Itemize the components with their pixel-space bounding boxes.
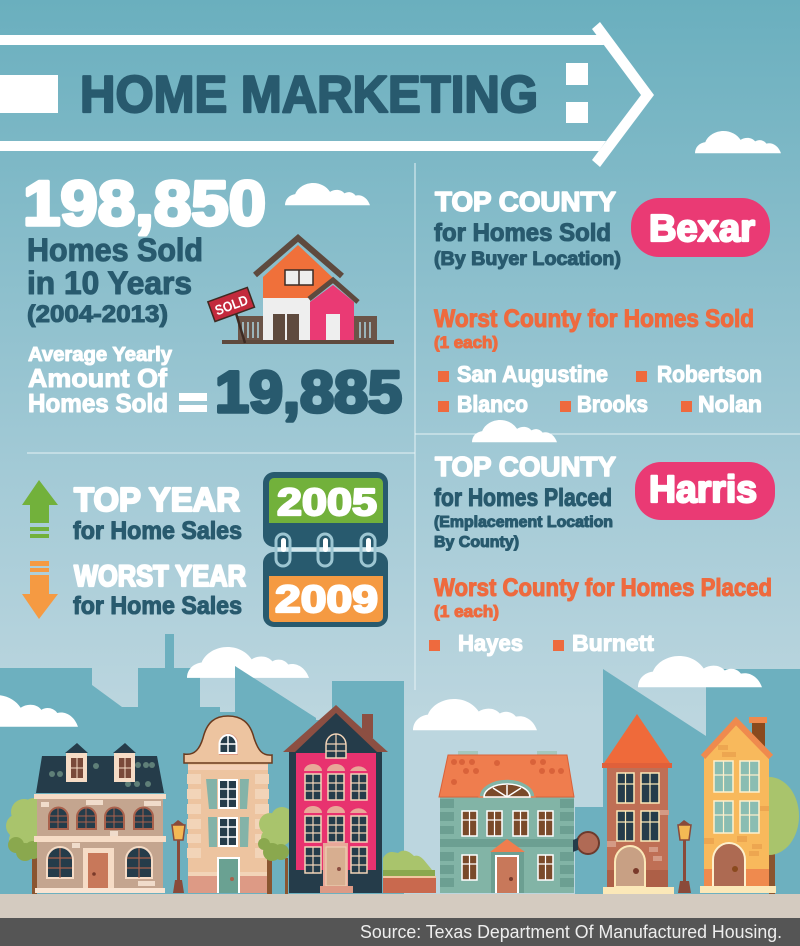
house 4 bbox=[439, 751, 574, 893]
shrub and brick wall bbox=[383, 851, 436, 893]
average yearly block bbox=[28, 344, 402, 425]
hanging shop sign bbox=[573, 832, 599, 854]
panel: top county homes sold: for Homes Sold bbox=[434, 219, 611, 247]
total homes sold block bbox=[23, 169, 266, 328]
skyline bbox=[0, 634, 800, 895]
top year text: for Home Sales bbox=[73, 517, 242, 545]
panel: worst county homes placed: Hayes bbox=[458, 630, 523, 656]
panel: top county homes sold: (By Buyer Location) bbox=[434, 249, 621, 270]
average yearly block: Homes Sold bbox=[28, 388, 168, 418]
panel: top county homes placed: By County) bbox=[434, 534, 519, 551]
panel: worst county homes sold: Brooks bbox=[577, 391, 648, 417]
panel: worst county homes sold: (1 each) bbox=[434, 333, 498, 352]
panel: worst county homes sold: Blanco bbox=[457, 391, 528, 417]
cloud behind skyline bbox=[187, 647, 309, 678]
top year text bbox=[73, 481, 242, 545]
calendar bbox=[263, 472, 388, 627]
house 1 bbox=[34, 743, 166, 893]
big number: 198,850 bbox=[23, 169, 266, 239]
left title block bbox=[0, 75, 58, 113]
average yearly block: Average Yearly bbox=[28, 344, 173, 366]
worst year text: for Home Sales bbox=[73, 592, 242, 620]
street lamp left bbox=[172, 820, 185, 893]
panel: worst county homes placed: (1 each) bbox=[434, 602, 499, 621]
panel: worst county homes sold: Worst County for Homes Sold bbox=[434, 305, 754, 333]
icon: up arrow bbox=[22, 480, 58, 538]
worst year text bbox=[73, 560, 246, 620]
tree left bbox=[6, 798, 46, 894]
pill: Bexar: Bexar bbox=[649, 208, 755, 250]
top year text: TOP YEAR bbox=[74, 481, 240, 518]
average number: 19,885 bbox=[215, 360, 402, 425]
divider lines bbox=[27, 163, 800, 690]
icon: house with sold sign: SOLD bbox=[213, 292, 250, 318]
worst year text: WORST YEAR bbox=[74, 560, 246, 593]
cloud centre skyline bbox=[413, 699, 537, 730]
homes sold text: Homes Sold bbox=[27, 232, 203, 268]
panel: top county homes placed: for Homes Placed bbox=[434, 484, 612, 512]
house 2 bbox=[184, 716, 272, 893]
total homes sold block: (2004-2013) bbox=[27, 301, 168, 328]
icon: down arrow bbox=[22, 561, 58, 619]
footer source bar bbox=[0, 918, 800, 946]
pill: Bexar bbox=[631, 198, 770, 257]
icon: house with sold sign bbox=[208, 238, 394, 344]
panel: worst county homes sold: Nolan bbox=[698, 391, 762, 417]
ground pavement bbox=[0, 894, 800, 918]
panel: top county homes sold bbox=[434, 186, 770, 270]
equals sign bbox=[179, 393, 207, 412]
panel: worst county homes sold: Robertson bbox=[657, 361, 762, 387]
pill: Harris bbox=[635, 462, 775, 520]
title arrow banner bbox=[0, 22, 654, 167]
house 5 bbox=[602, 714, 674, 894]
cloud top right bbox=[695, 131, 781, 153]
panel: top county homes placed: TOP COUNTY bbox=[435, 451, 616, 482]
cloud right skyline bbox=[638, 656, 762, 687]
average yearly block: Amount Of bbox=[28, 363, 167, 393]
panel: top county homes placed bbox=[434, 451, 775, 551]
panel: worst county homes sold bbox=[434, 305, 762, 417]
cloud left skyline bbox=[0, 695, 78, 727]
panel: worst county homes placed bbox=[429, 574, 772, 656]
pill: Harris: Harris bbox=[649, 469, 757, 511]
tree middle bbox=[258, 807, 293, 894]
house 6 bbox=[700, 717, 776, 893]
street lamp right bbox=[678, 820, 691, 893]
tree right bbox=[739, 777, 799, 894]
house 3 bbox=[283, 705, 388, 893]
panel: top county homes placed: (Emplacement Location bbox=[434, 514, 613, 531]
cloud beside total bbox=[285, 183, 370, 205]
footer source bar: Source: Texas Department Of Manufactured Housing. bbox=[360, 922, 782, 942]
panel: top county homes sold: TOP COUNTY bbox=[435, 186, 616, 217]
total homes sold block: in 10 Years bbox=[27, 265, 192, 301]
calendar: 2009 bbox=[275, 579, 378, 621]
panel: worst county homes placed: Burnett bbox=[572, 630, 654, 656]
calendar: 2005 bbox=[277, 482, 377, 524]
skyline overlap wedge bbox=[235, 666, 316, 725]
title squares bbox=[566, 63, 588, 123]
cloud on right divider bbox=[472, 420, 557, 442]
panel: worst county homes sold: San Augustine bbox=[457, 361, 608, 387]
title: HOME MARKETING bbox=[80, 66, 538, 124]
